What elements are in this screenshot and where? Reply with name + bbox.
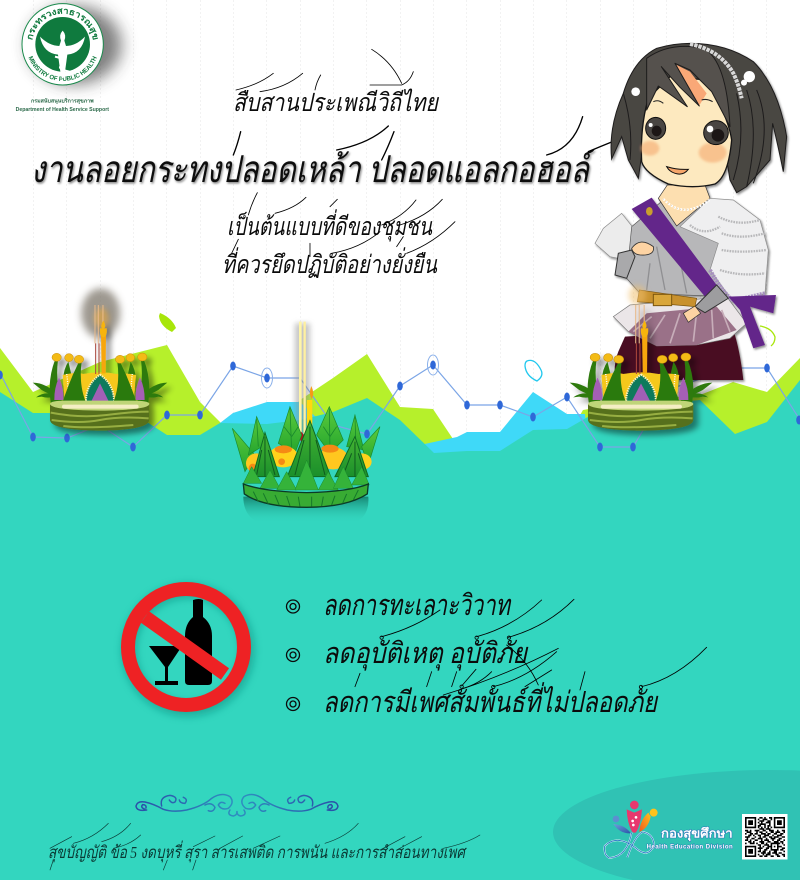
connected dot line chart [0, 355, 800, 452]
krathong body [570, 305, 712, 431]
right arm and hand [695, 285, 728, 313]
title swash strokes [232, 49, 617, 257]
face [641, 77, 732, 187]
decorative lime outline leaf [760, 326, 775, 346]
wine bottle [185, 599, 212, 685]
right small krathong [570, 285, 712, 431]
right lace frill [680, 198, 768, 302]
ornamental flourish divider [136, 795, 338, 816]
leaf veins [257, 427, 365, 477]
bullet three: ลดการมีเพศสัมพันธ์ที่ไม่ปลอดภัย [323, 682, 659, 719]
left small krathong [33, 288, 167, 431]
forehead shadow strands [661, 65, 707, 106]
line 1 heading: สืบสานประเพณีวิถีไทย [233, 88, 440, 117]
footer swash strokes [50, 823, 480, 870]
sign shadow [129, 591, 247, 709]
incense glow [629, 285, 646, 305]
logo English arc text: MINISTRY OF PUBLIC HEALTH [28, 56, 97, 81]
logo Thai arc text: กระทรวงสาธารณสุข [28, 8, 98, 40]
reflection [243, 497, 368, 523]
QR code [742, 814, 788, 860]
logo green centre [35, 17, 90, 72]
logo figure: blue [613, 816, 631, 833]
neck and chest skin [658, 185, 710, 226]
purple sash [632, 198, 717, 297]
brows and mouth [653, 99, 713, 103]
lower small leaves row [243, 460, 369, 490]
logo caduceus emblem [40, 31, 85, 79]
bullet three [286, 682, 659, 719]
centre banana leaf krathong [232, 322, 380, 523]
dark skirt [615, 330, 743, 380]
hair back [611, 43, 787, 193]
krathong body [33, 305, 167, 431]
bullet one: ลดการทะเลาะวิวาท [323, 590, 511, 622]
wave: teal body [0, 380, 800, 880]
logo caption English: Department of Health Service Support [16, 107, 109, 113]
hair dark strands [623, 90, 764, 187]
red circle [128, 589, 244, 705]
girl character in Thai dress [595, 43, 787, 380]
cursive H mark [604, 832, 654, 858]
line 4 heading: ที่ควรยึดปฏิบัติอย่างยั่งยืน [222, 247, 438, 279]
cheeks [641, 141, 659, 156]
left half of flourish [136, 795, 237, 816]
front dark leaves [253, 421, 368, 477]
decorative lime leaf [159, 313, 176, 332]
logo soft shadow [28, 6, 122, 84]
bullet list [286, 590, 707, 719]
line 3 heading: เป็นต้นแบบที่ดีของชุมชน [227, 209, 433, 242]
eyes [646, 117, 728, 145]
torso blouse [627, 200, 727, 297]
footer health precept text [48, 823, 480, 870]
pearl necklace [663, 199, 709, 210]
back leaves [232, 407, 380, 472]
back leaf veins [257, 408, 356, 450]
incense glow [81, 288, 120, 338]
right half of flourish [237, 795, 338, 816]
gold belt [637, 290, 697, 307]
logo figure: orange [639, 809, 658, 832]
logo caption Thai: กรมสนับสนุนบริการสุขภาพ [31, 98, 94, 105]
marigold flowers [246, 445, 372, 473]
bottom right darker ellipse [553, 770, 800, 880]
lace overskirt [613, 297, 747, 346]
cocktail glass [149, 646, 182, 685]
logo ring [22, 4, 103, 85]
incense sticks with glow [295, 323, 310, 433]
left arm and hand [615, 250, 635, 278]
health education division logo [604, 801, 733, 858]
footer line: สุขบัญญัติ ข้อ 5 งดบุหรี่ สุรา สารเสพติด การพนัน และการสำส่อนทางเพศ [48, 840, 468, 863]
title block [31, 49, 617, 279]
English division name: Health Education Division [647, 844, 733, 850]
wave: lime layer [0, 345, 800, 470]
wave: sky blue layer [220, 392, 590, 460]
left frill sleeve [595, 213, 635, 260]
decorative blue outline leaf [525, 360, 542, 381]
line 2 main title: งานลอยกระทงปลอดเหล้า ปลอดแอลกอฮอล์ [31, 149, 595, 191]
logo figure: pink [627, 801, 642, 833]
Thai division name: กองสุขศึกษา [661, 826, 733, 841]
red diagonal bar [145, 617, 225, 674]
bullet one [286, 590, 511, 622]
bullet swash strokes [355, 599, 707, 695]
krathong base [243, 484, 368, 507]
sash tail [728, 295, 776, 348]
yellow candle [307, 400, 312, 437]
hair pearl band [690, 44, 742, 98]
ministry of public health logo [16, 0, 132, 113]
fringe [647, 46, 730, 127]
no alcohol prohibition sign [128, 589, 247, 709]
bullet two: ลดอุบัติเหตุ อุบัติภัย [323, 638, 529, 671]
